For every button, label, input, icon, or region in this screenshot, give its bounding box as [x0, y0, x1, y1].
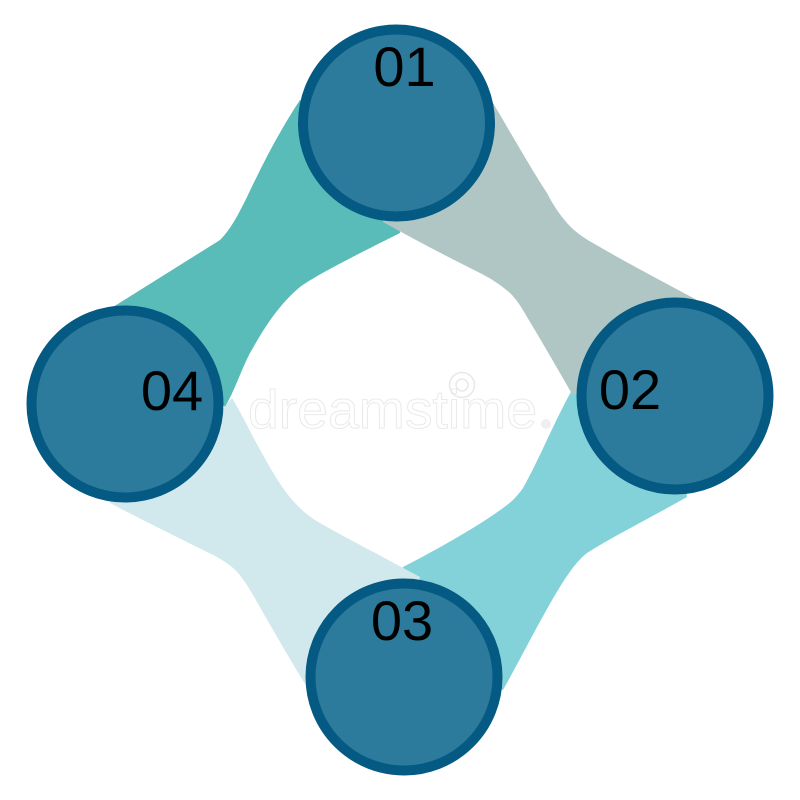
ribbon: 03 to 04 [110, 398, 420, 687]
ribbon: 02 to 03 [403, 390, 687, 690]
ribbon: 01 to 02 [383, 103, 697, 396]
node 02: 02 [599, 358, 661, 421]
node 03 [310, 584, 498, 770]
watermark: dreamstime [248, 380, 537, 440]
node 01: 01 [373, 35, 436, 98]
node 01 [303, 30, 490, 216]
node 04: 04 [141, 359, 203, 422]
node 02 [582, 302, 768, 490]
ribbon: 04 to 01 [113, 100, 400, 407]
node 03: 03 [371, 589, 433, 652]
node 04 [32, 310, 218, 498]
